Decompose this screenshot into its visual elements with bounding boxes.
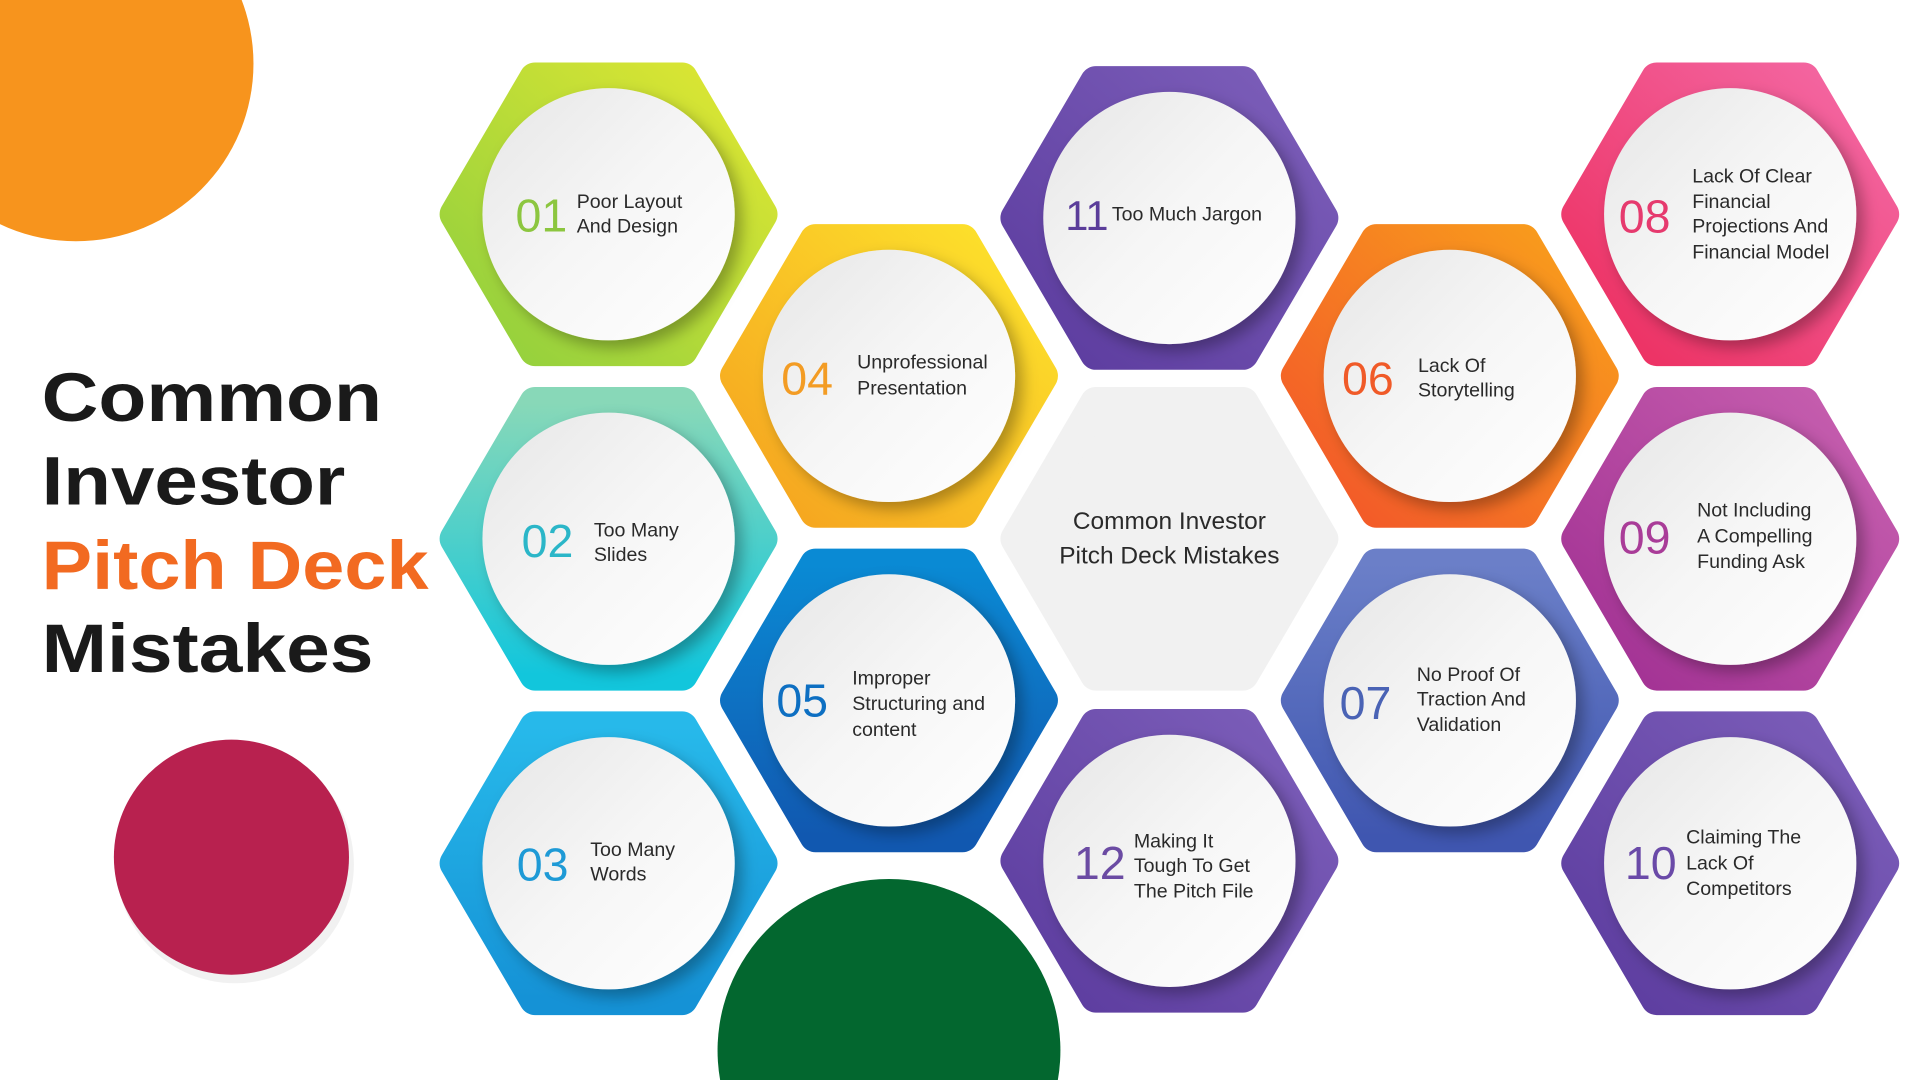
- item 11: Too Much Jargon: [1112, 203, 1262, 225]
- center hexagon: [1016, 403, 1322, 675]
- item 01: And Design: [577, 216, 678, 238]
- title: Common: [42, 359, 382, 436]
- item 11: 11: [1065, 192, 1109, 239]
- item 08: [1577, 78, 1883, 350]
- item 06: [1297, 240, 1603, 512]
- item 04: Unprofessional: [857, 352, 988, 374]
- title: Investor: [42, 442, 345, 519]
- item 05: content: [852, 719, 917, 741]
- title: Mistakes: [42, 610, 373, 687]
- item 09: [1577, 403, 1883, 675]
- title: Pitch Deck: [42, 527, 430, 604]
- item 07: [1297, 564, 1603, 836]
- item 06: 06: [1342, 352, 1394, 404]
- item 10: 10: [1625, 837, 1677, 889]
- item 03: Too Many: [590, 839, 675, 861]
- item 03: 03: [517, 838, 568, 890]
- item 05: [736, 564, 1042, 836]
- decorative orange circle: [0, 0, 253, 241]
- item 02: [456, 403, 762, 675]
- item 02: 02: [522, 515, 573, 567]
- item 12: Making It: [1134, 830, 1214, 852]
- center hexagon: Common Investor: [1073, 508, 1266, 535]
- item 06: Lack Of: [1418, 355, 1486, 377]
- item 12: Tough To Get: [1134, 855, 1251, 877]
- title: [42, 359, 430, 687]
- item 01: [456, 78, 762, 350]
- item 10: [1577, 727, 1883, 999]
- item 09: Funding Ask: [1697, 551, 1805, 573]
- item 07: Traction And: [1417, 688, 1526, 710]
- item 10: Claiming The: [1686, 827, 1801, 849]
- item 12: 12: [1074, 837, 1126, 889]
- item 03: [456, 727, 762, 999]
- item 02: Slides: [594, 544, 647, 566]
- item 12: The Pitch File: [1134, 881, 1254, 903]
- item 02: Too Many: [594, 519, 679, 541]
- item 01: Poor Layout: [577, 191, 683, 213]
- item 07: 07: [1340, 677, 1391, 729]
- decorative green circle: [718, 879, 1060, 1080]
- item 03: Words: [590, 863, 647, 885]
- item 08: 08: [1619, 191, 1671, 243]
- item 05: 05: [776, 674, 828, 726]
- item 05: Structuring and: [852, 693, 985, 715]
- item 06: Storytelling: [1418, 380, 1515, 402]
- item 09: A Compelling: [1697, 525, 1813, 547]
- item 08: Financial Model: [1692, 241, 1829, 263]
- item 08: Lack Of Clear: [1692, 165, 1812, 187]
- item 01: 01: [516, 189, 567, 241]
- item 07: Validation: [1417, 714, 1501, 736]
- item 10: Lack Of: [1686, 852, 1754, 874]
- item 08: Projections And: [1692, 216, 1828, 238]
- item 04: [736, 240, 1042, 512]
- decorative crimson circle: [114, 740, 354, 983]
- item 10: Competitors: [1686, 878, 1792, 900]
- item 08: Financial: [1692, 191, 1771, 213]
- center hexagon: Pitch Deck Mistakes: [1059, 542, 1280, 569]
- item 11: [1016, 82, 1322, 354]
- item 07: No Proof Of: [1417, 664, 1521, 686]
- item 09: Not Including: [1697, 500, 1811, 522]
- item 09: 09: [1619, 511, 1671, 563]
- item 05: Improper: [852, 667, 931, 689]
- item 04: Presentation: [857, 377, 967, 399]
- item 12: [1016, 725, 1322, 997]
- item 04: 04: [781, 352, 833, 404]
